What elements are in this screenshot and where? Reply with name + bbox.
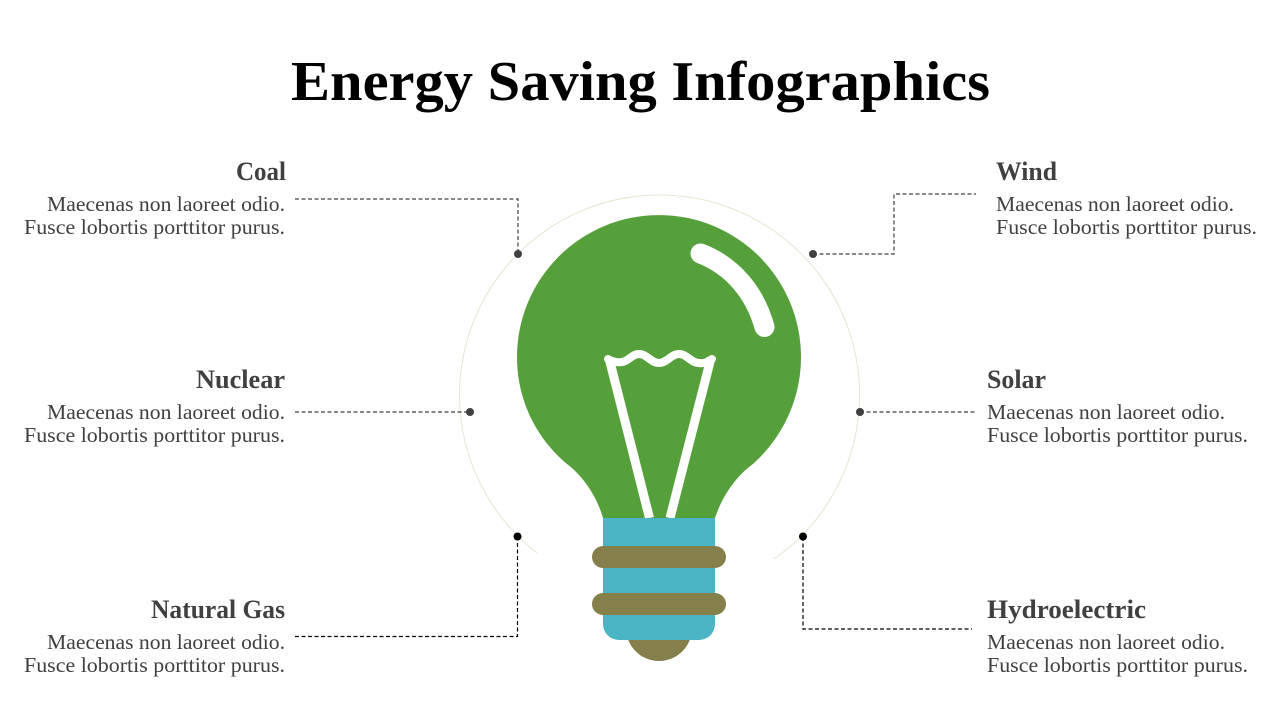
text block: natural gas	[24, 595, 285, 677]
text block: wind: Maecenas non laoreet odio.	[996, 192, 1234, 216]
text block: natural gas: Fusce lobortis porttitor purus.	[24, 653, 285, 677]
connector: solar	[856, 408, 975, 416]
text block: solar: Maecenas non laoreet odio.	[987, 400, 1225, 424]
text block: wind: Fusce lobortis porttitor purus.	[996, 215, 1257, 239]
base band upper	[592, 546, 726, 568]
base band lower	[592, 593, 726, 615]
connector: nuclear	[295, 408, 474, 416]
text block: solar: Fusce lobortis porttitor purus.	[987, 423, 1248, 447]
text block: nuclear	[24, 365, 285, 447]
title: Energy Saving Infographics	[291, 51, 990, 113]
text block: nuclear: Maecenas non laoreet odio.	[47, 400, 285, 424]
text block: solar	[987, 365, 1248, 447]
text block: natural gas: Maecenas non laoreet odio.	[47, 630, 285, 654]
text block: nuclear: Nuclear	[196, 365, 285, 394]
bulb highlight	[700, 254, 764, 327]
icon: light bulb	[517, 215, 801, 661]
text block: wind	[996, 157, 1257, 239]
text block: coal: Maecenas non laoreet odio.	[47, 192, 285, 216]
filament	[608, 354, 712, 518]
bulb base	[603, 518, 715, 640]
text block: coal	[24, 157, 286, 239]
text block: coal: Fusce lobortis porttitor purus.	[24, 215, 285, 239]
text block: nuclear: Fusce lobortis porttitor purus.	[24, 423, 285, 447]
connector: natural gas	[295, 532, 522, 636]
text block: solar: Solar	[987, 365, 1046, 394]
text block: hydroelectric: Hydroelectric	[987, 595, 1146, 624]
text block: hydroelectric: Fusce lobortis porttitor purus.	[987, 653, 1248, 677]
decorative ring around bulb	[460, 195, 860, 559]
connector: wind	[809, 194, 976, 258]
text block: hydroelectric	[987, 595, 1248, 677]
connector: hydroelectric	[799, 532, 972, 629]
text block: wind: Wind	[996, 157, 1058, 186]
connector: coal	[295, 199, 522, 258]
text block: coal: Coal	[236, 157, 286, 186]
bulb cap	[626, 595, 692, 661]
bulb glass	[517, 215, 801, 518]
text block: natural gas: Natural Gas	[151, 595, 285, 624]
text block: hydroelectric: Maecenas non laoreet odio.	[987, 630, 1225, 654]
